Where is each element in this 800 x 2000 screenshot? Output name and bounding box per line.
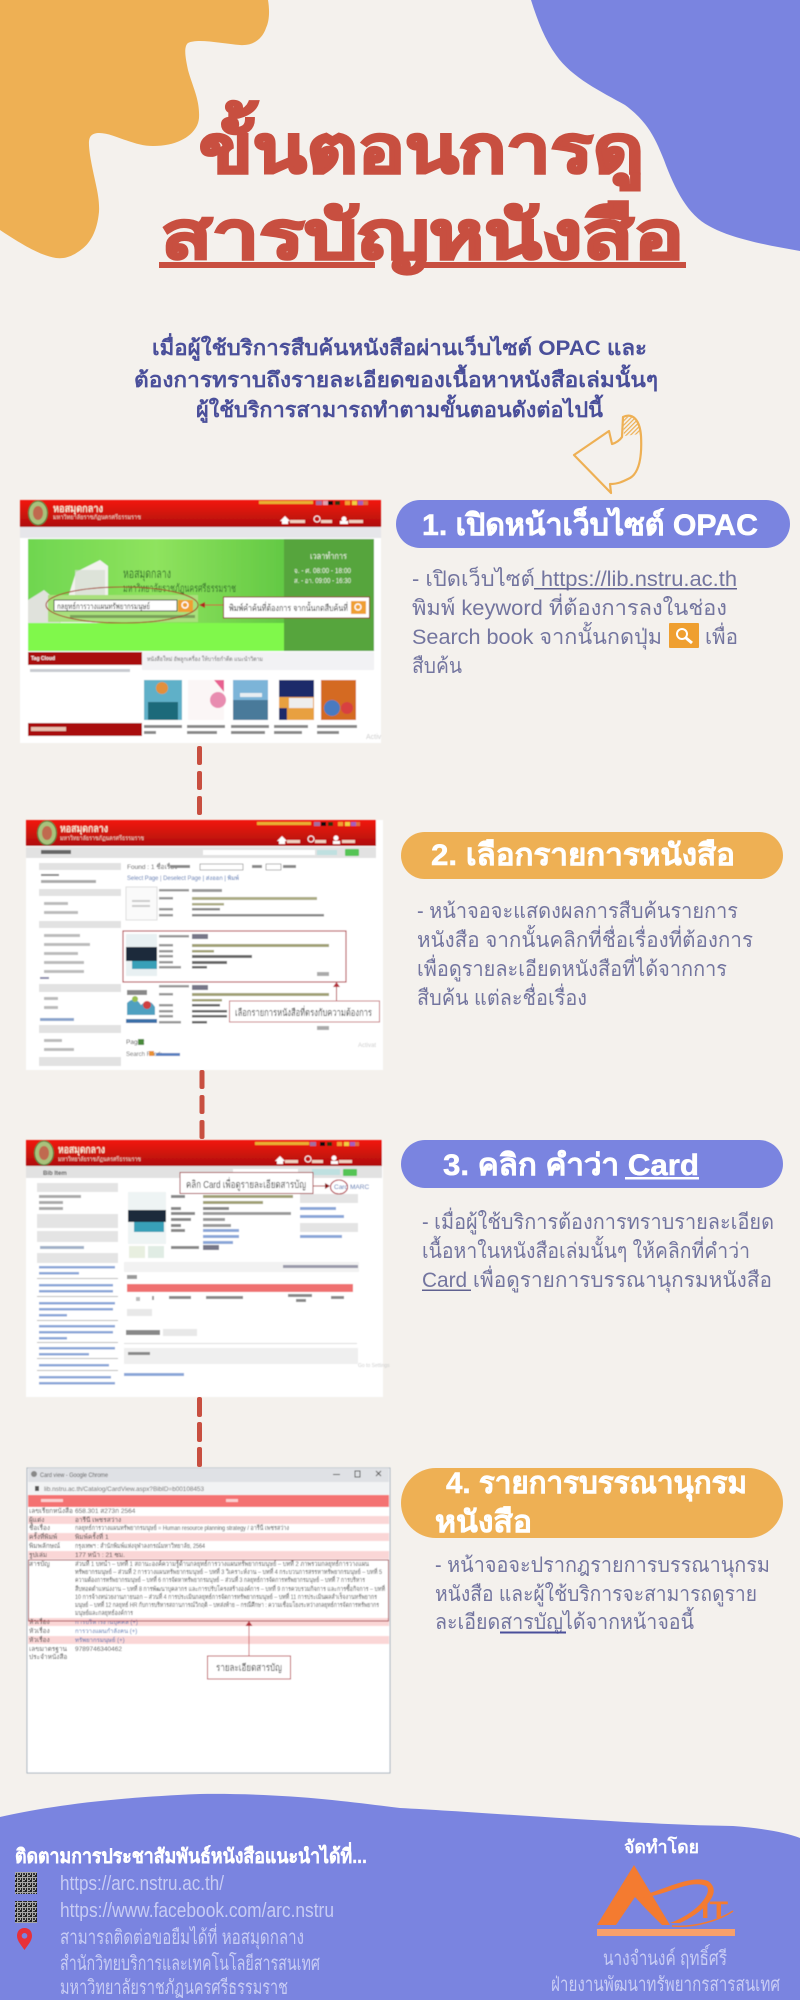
screenshot 3: book detail page: Bib Item <box>43 1171 67 1177</box>
screenshot 4: catalog card window: มนุษย์ – บทที่ 12 กลยุทธ์ HR กับการบริหารสถานการณ์วิกฤติ – บทส่งท้าย – กรณีศึกษา : ความเชื่อมโยงระหว่างกลยุทธ์การจัดการทรัพยากร <box>75 1600 379 1609</box>
screenshot 4: catalog card window: รายละเอียดสารบัญ <box>216 1662 282 1674</box>
facebook link: https://www.facebook.com/arc.nstru <box>60 1900 334 1922</box>
screenshot 3: book detail page: คลิก Card เพื่อดูรายละเอียดสารบัญ <box>186 1177 306 1191</box>
screenshot 4: catalog card window: อารีนี เพชรสว่าง <box>75 1516 121 1524</box>
step 2 description: หนังสือ จากนั้นคลิกที่ชื่อเรื่องที่ต้องการ <box>417 925 753 952</box>
screenshot 4: catalog card window: หัวเรื่อง <box>29 1617 50 1626</box>
website link: https://arc.nstru.ac.th/ <box>60 1873 224 1895</box>
screenshot 4: catalog card window: ส่วนที่ 1 บทนำ – บทที่ 1 สถานะองค์ความรู้ด้านกลยุทธ์การวางแผนทรัพยากรมนุษย์ – บทที่ 2 ภาพรวมกลยุทธ์การวางแผน <box>75 1559 369 1568</box>
screenshot 4: catalog card window: เลขมาตรฐาน <box>29 1646 68 1653</box>
contact address: สามารถติดต่อขอยืมได้ที่ หอสมุดกลาง <box>60 1923 304 1950</box>
step 4 heading pill <box>401 1467 783 1539</box>
screenshot 4: catalog card window: เลขเรียกหนังสือ <box>29 1507 73 1515</box>
screenshot 2: search results: Activat <box>358 1043 376 1049</box>
screenshot 2: search results: เลือกรายการหนังสือที่ตรงกับความต้องการ <box>235 1005 372 1019</box>
screenshot 4: catalog card window: 9789746340462 <box>75 1646 122 1653</box>
screenshot 1: OPAC home page: หอสมุดกลาง <box>53 504 103 515</box>
screenshot 4: catalog card window: 658.301 ส273ก 2564 <box>75 1508 136 1515</box>
screenshot 4: catalog card window: การบริหารงานบุคคล (+) <box>75 1619 138 1626</box>
screenshot 2: search results: Search Feed: <box>126 1052 162 1058</box>
screenshot 4: catalog card window: พิมพลักษณ์ <box>29 1542 60 1550</box>
screenshot 4: catalog card window: ครั้งที่พิมพ์ <box>29 1532 57 1541</box>
title <box>159 100 686 274</box>
title: ขั้นตอนการดู <box>199 100 644 191</box>
made by heading: จัดทำโดย <box>624 1836 699 1857</box>
intro text: ต้องการทราบถึงรายละเอียดของเนื้อหาหนังสือเล่มนั้นๆ <box>134 364 658 392</box>
screenshot 4: catalog card window: สืบทอดตำแหน่งงาน – บทที่ 8 การพัฒนาบุคลากร และการปรับโครงสร้างองค์การ – บทที่ 9 การควบรวมกิจการ และการซื้อกิจการ – บทที่ <box>75 1584 385 1593</box>
screenshot 4: catalog card window: สารบัญ <box>29 1560 50 1568</box>
screenshot 1: OPAC home page: หนังสือใหม่ อัพลูกเครื่อง ให้บาร์ยกำตีด แนะนำวิตาม <box>147 655 263 663</box>
screenshot 4: catalog card window: การวางแผนกำลังคน (+) <box>75 1628 137 1635</box>
screenshot 4: catalog card window: พิมพ์ครั้งที่ 1 <box>75 1532 109 1541</box>
screenshot 2: search results: Found : 1 ชื่อเรื่อง <box>127 862 177 871</box>
step 1 description <box>412 565 738 678</box>
logo: ARC IT: IT <box>701 1897 728 1924</box>
step 4 description: หนังสือ และผู้ใช้บริการจะสามารถดูราย <box>435 1582 757 1607</box>
screenshot 2: search results <box>26 820 383 1070</box>
contact address: สำนักวิทยบริการและเทคโนโลยีสารสนเทศ <box>60 1952 320 1975</box>
screenshot 4: catalog card window: กรุงเทพฯ : สำนักพิมพ์แห่งจุฬาลงกรณ์มหาวิทยาลัย, 2564 <box>75 1542 205 1550</box>
screenshot 2: search results: Select Page | Deselect Page | ส่งออก | พิมพ์ <box>127 874 239 882</box>
screenshot 1: OPAC home page: Tag Cloud <box>31 656 55 662</box>
step 3 description: Card เพื่อดูรายการบรรณานุกรมหนังสือ <box>422 1265 772 1293</box>
contact address <box>60 1923 320 1999</box>
screenshot 1: OPAC home page <box>20 500 382 743</box>
step 1 description: เพื่อ <box>705 622 738 649</box>
screenshot 4: catalog card window: มนุษย์และกลยุทธ์องค์การ <box>75 1609 133 1617</box>
icon: QR code website <box>15 1872 37 1894</box>
screenshot 4: catalog card window: Card view - Google Chrome <box>40 1472 108 1479</box>
screenshot 2: search results: มหาวิทยาลัยราชภัฏนครศรีธรรมราช <box>60 834 144 842</box>
step 2 description: - หน้าจอจะแสดงผลการสืบค้นรายการ <box>417 900 738 923</box>
screenshot 3: book detail page: หอสมุดกลาง <box>58 1145 105 1156</box>
step 1 description: สืบค้น <box>412 655 462 678</box>
dashed connector 2 <box>200 1070 204 1139</box>
footer contact heading: ติดตามการประชาสัมพันธ์หนังสือแนะนำได้ที่... <box>15 1841 367 1868</box>
step 4 description <box>435 1554 770 1634</box>
screenshot 4: catalog card window <box>27 1468 390 1773</box>
screenshot 4: catalog card window: ชื่อเรื่อง <box>29 1523 50 1532</box>
screenshot 4: catalog card window: ผู้แต่ง <box>29 1516 44 1524</box>
screenshot 4: catalog card window: หัวเรื่อง <box>29 1635 50 1644</box>
step 3 heading pill <box>401 1140 783 1188</box>
screenshot 1: OPAC home page: Activ <box>366 734 382 741</box>
step 2 heading pill <box>401 832 783 879</box>
step 1 description: - เปิดเว็บไซต์ https://lib.nstru.ac.th <box>412 565 737 591</box>
step 2 description: สืบค้น แต่ละชื่อเรื่อง <box>417 983 587 1010</box>
step 4 heading pill: หนังสือ <box>435 1506 532 1539</box>
screenshot 1: OPAC home page: จ. - ศ. 08:00 - 18:00 <box>294 568 351 575</box>
screenshot 3: book detail page: มหาวิทยาลัยราชภัฏนครศรีธรรมราช <box>58 1155 141 1163</box>
screenshot 4: catalog card window: ประจำหนังสือ <box>29 1653 67 1661</box>
step 4 heading pill: 4. รายการบรรณานุกรม <box>446 1467 747 1502</box>
step 2 description: เพื่อดูรายละเอียดหนังสือที่ได้จากการ <box>417 954 727 982</box>
contact address: มหาวิทยาลัยราชภัฏนครศรีธรรมราช <box>60 1977 288 1999</box>
step 1 description: พิมพ์ keyword ที่ต้องการลงในช่อง <box>412 593 727 620</box>
screenshot 4: catalog card window: รูปเล่ม <box>29 1552 47 1559</box>
screenshot 1: OPAC home page: มหาวิทยาลัยราชภัฏนครศรีธรรมราช <box>53 513 141 521</box>
footer band <box>0 1794 800 2000</box>
screenshot 4: catalog card window: กลยุทธ์การวางแผนทรัพยากรมนุษย์ = Human resource planning strategy / อารีนี เพชรสว่าง <box>75 1524 289 1532</box>
step 3 description: เนื้อหาในหนังสือเล่มนั้นๆ ให้คลิกที่คำว่า <box>422 1236 750 1263</box>
screenshot 3: book detail page: Card <box>334 1184 348 1191</box>
step 2 description <box>417 900 753 1010</box>
screenshot 1: OPAC home page: ส. - อา. 09:00 - 16:30 <box>294 578 351 585</box>
icon: hand-drawn arrow <box>574 416 641 493</box>
intro text: ผู้ใช้บริการสามารถทำตามขั้นตอนดังต่อไปนี้ <box>196 394 604 424</box>
title: สารบัญหนังสือ <box>161 198 684 274</box>
screenshot 4: catalog card window: ทรัพยากรมนุษย์ – ส่วนที่ 2 การวางแผนทรัพยากรมนุษย์ – บทที่ 3 วิเคราะห์งาน – บทที่ 4 กระบวนการสรรหาทรัพยากรมนุษย์ – บทที่ 5 <box>75 1567 382 1576</box>
screenshot 4: catalog card window: 10 การจ้างหน่วยงานภายนอก – ส่วนที่ 4 การประเมินกลยุทธ์การจัดการทรัพยากรมนุษย์ – บทที่ 11 การประเมินผลสำเร็จงานทรัพยากร <box>75 1592 377 1601</box>
logo: ARC IT <box>597 1865 735 1936</box>
dashed connector 1 <box>197 746 202 815</box>
decorative blue blob <box>531 0 800 251</box>
step 2 heading pill: 2. เลือกรายการหนังสือ <box>431 839 735 872</box>
screenshot 4: catalog card window: ทรัพยากรมนุษย์ (+) <box>75 1636 125 1644</box>
screenshot 2: search results: Page : <box>126 1039 145 1046</box>
step 4 description: - หน้าจอจะปรากฎรายการบรรณานุกรม <box>435 1554 770 1578</box>
screenshot 1: OPAC home page: เวลาทำการ <box>310 551 347 561</box>
intro text <box>134 332 658 424</box>
screenshot 3: book detail page: MARC <box>350 1184 369 1191</box>
icon: QR code facebook <box>15 1901 37 1923</box>
step 1 heading pill <box>396 500 790 548</box>
icon: location pin <box>17 1928 32 1950</box>
screenshot 1: OPAC home page: พิมพ์คำค้นที่ต้องการ จากนั้นกดสืบค้นที่ <box>229 601 348 613</box>
screenshot 4: catalog card window: หัวเรื่อง <box>29 1626 50 1635</box>
screenshot 3: book detail page <box>26 1140 390 1397</box>
screenshot 1: OPAC home page: มหาวิทยาลัยราชภัฏนครศรีธรรมราช <box>123 582 236 595</box>
author name: นางจำนงค์ ฤทธิ์ศรี <box>603 1943 727 1970</box>
step 3 description <box>422 1207 774 1293</box>
step 4 description: ละเอียดสารบัญได้จากหน้าจอนี้ <box>435 1607 694 1634</box>
intro text: เมื่อผู้ใช้บริการสืบค้นหนังสือผ่านเว็บไซต์ OPAC และ <box>152 332 647 362</box>
step 3 description: - เมื่อผู้ใช้บริการต้องการทราบรายละเอียด <box>422 1207 774 1235</box>
screenshot 3: book detail page: Go to Settings <box>358 1363 390 1369</box>
screenshot 4: catalog card window: ความต้องการทรัพยากรมนุษย์ – บทที่ 6 การจัดหาทรัพยากรมนุษย์ – ส่วนที่ 3 กลยุทธ์การจัดการทรัพยากรมนุษย์ – บทที่ 7 การบริหาร <box>75 1575 365 1584</box>
step 1 description: Search book จากนั้นกดปุ่ม <box>412 622 662 650</box>
screenshot 2: search results: หอสมุดกลาง <box>60 824 108 835</box>
screenshot 1: OPAC home page: หอสมุดกลาง <box>123 566 171 582</box>
decorative orange blob <box>0 0 269 258</box>
step 1 heading pill: 1. เปิดหน้าเว็บไซต์ OPAC <box>422 506 758 542</box>
dashed connector 3 <box>197 1397 202 1467</box>
screenshot 4: catalog card window: 177 หน้า : 21 ซม. <box>75 1551 125 1559</box>
screenshot 4: catalog card window: lib.nstru.ac.th/Catalog/CardView.aspx?BibID=b00108453 <box>44 1486 204 1493</box>
screenshot 1: OPAC home page: กลยุทธ์การวางแผนทรัพยากรมนุษย์ <box>57 601 150 611</box>
step 3 heading pill: 3. คลิก คำว่า Card <box>443 1149 699 1182</box>
